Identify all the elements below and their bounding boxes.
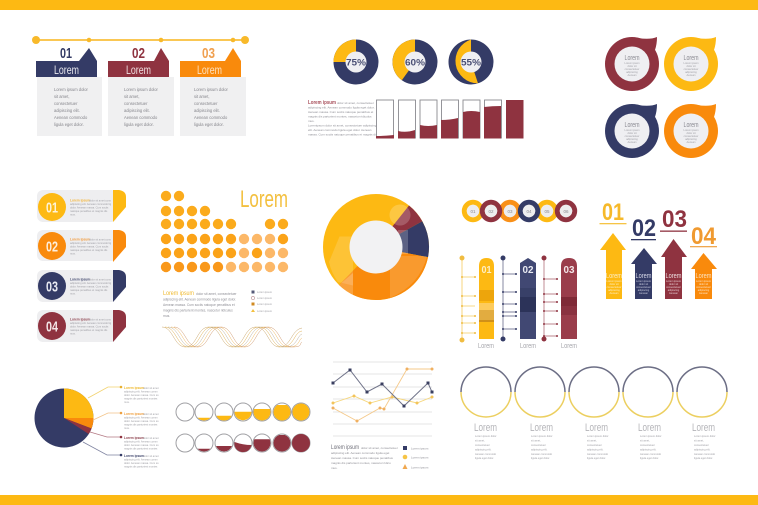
panel: arrow 03: Lorem [666,273,682,280]
circle item 2: Lorem ipsum dolor [531,434,553,438]
circle item 3: ligula eget dolor. [587,456,606,460]
row 01: 01 [46,200,58,216]
panel: arrow 04: 04 [691,223,717,250]
row 02: Lorem ipsum [70,238,90,242]
chart: yellow fill circles [176,403,310,421]
card 02: consectetuer [124,101,148,106]
row 03: 03 [46,278,58,296]
callout maroon: Lorem ipsum [124,436,144,440]
ring yellow: consectetuer [684,67,699,71]
callout maroon: magnis dis parturient montes [124,446,158,450]
legend: dot matrix: Lorem ipsum [257,309,272,313]
panel: arrow 01 [600,199,626,299]
panel: numbered rows [37,190,126,342]
legend: line graph: Lorem ipsum [411,446,429,450]
text block: line graph description: Aenean massa. Cum sociis natoque penatibus [331,456,393,460]
panel: ring chain: 05 [544,209,550,214]
callout maroon: adipiscing elit. Aenean comm [124,440,158,444]
row 04: 04 [46,318,58,336]
callout maroon [90,432,159,450]
panel: arrow 03: 03 [662,206,687,233]
row 03: natoque penatibus et magnis dis [70,288,108,292]
panel: arrow 02: Aenean [639,291,649,295]
panel: arrow 04 [690,223,717,299]
text block: bar description: Lorem ipsum [308,100,336,106]
series orange [332,368,434,422]
legend: dot matrix: Lorem ipsum [257,296,272,300]
circle item 3: Aenean commodo [587,452,609,456]
circle item 1: ligula eget dolor. [475,456,494,460]
text block: bar description [308,100,378,136]
panel: ring chain: 01 [470,209,476,214]
panel: arrow 04: Aenean [699,291,709,295]
card 01: adipiscing elit. [54,108,80,113]
row 01 [37,190,126,222]
ring maroon [605,37,659,91]
ring orange: dolor sit [686,131,696,135]
circle item 3: consectetuer [587,443,602,447]
text block: dot matrix description: dolor sit amet, consectetuer [196,292,237,296]
ring maroon: adipiscing [626,70,638,74]
panel: column 02 with ticks: 02 [522,265,534,276]
panel: arrow 04: Lorem ipsum [696,279,711,283]
circle item 2: ligula eget dolor. [531,456,550,460]
card 03: consectetuer [194,101,218,106]
ring navy: consectetuer [625,134,640,138]
ring maroon: consectetuer [625,67,640,71]
panel: ring chain: 06 [563,209,569,214]
row 03: dolor. Aenean massa. Cum sociis [70,284,109,288]
callout yellow: dolor. Aenean massa. Cum so [124,393,159,397]
text block: bar description: Aenean massa. Cum sociis natoque penatibus et [308,110,373,114]
row 02: natoque penatibus et magnis dis [70,248,108,252]
panel: arrow 02: consectetuer [636,285,651,289]
panel: arrow 04: adipiscing [698,288,710,292]
row 02 [37,230,126,262]
panel: ring chain: 04 [526,209,532,214]
panel: arrow 01: 01 [602,199,624,226]
callout yellow [88,386,159,404]
callout maroon: dolor. Aenean massa. Cum so [124,443,159,447]
row 04: mus. [70,332,76,336]
card 02: Aenean commodo [124,115,158,120]
row 01: natoque penatibus et magnis dis [70,209,108,213]
callout yellow: mus. [124,401,130,404]
panel: arrow 01: Lorem ipsum [606,279,622,283]
panel: arrow 03 [660,206,687,299]
text block: bar description: mus. [308,119,315,123]
card 01: Aenean commodo [54,115,88,120]
circle item 4: Lorem [638,422,661,434]
ring orange [664,104,718,158]
legend: dot matrix [251,290,272,313]
panel: arrow 01: Lorem [606,273,622,280]
text block: line graph description [331,444,398,470]
row 04: Lorem ipsum [70,318,90,322]
card 01: ligula eget dolor. [54,122,84,127]
panel: arrow 03: Lorem ipsum [666,279,681,283]
panel: arrow 03: Aenean [669,291,679,295]
panel: arrow 02: dolor sit [639,282,648,286]
card 03: Lorem [197,63,222,77]
ring orange: consectetuer [684,134,699,138]
donut 55%: 55% [461,58,481,68]
text block: bar description: elit. Aenean commodo ligula eget dolor. Aenean [308,128,372,132]
card 01: consectetuer [54,101,78,106]
ring navy: dolor sit [627,131,637,135]
text block: dot matrix description [163,290,237,318]
circle item 5: sit amet, [694,438,704,442]
legend: dot matrix: Lorem ipsum [257,290,272,294]
circle item 5: Lorem [692,422,715,434]
callout orange: dolor. Aenean massa. Cum so [124,419,159,423]
callout navy: Lorem ipsum [124,454,144,458]
row 02: adipiscing elit. Aenean commodo lig [70,241,112,245]
row 02: 02 [46,238,58,256]
panel: outline circles with captions [461,367,727,460]
ring maroon: Aenean [628,73,637,77]
circle item 2 [515,367,565,460]
row 04: dolor sit amet cons [89,318,111,322]
circle item 3: Lorem [585,422,608,434]
ring navy [605,104,659,158]
panel: arrow 02: 02 [632,215,656,242]
circle item 4: consectetuer [640,443,655,447]
ring yellow: dolor sit [686,64,696,68]
top yellow band [0,0,758,10]
ring navy: Lorem ipsum [624,128,640,132]
ring yellow: Lorem [684,55,699,62]
panel: column 03 with ticks: 03 [564,265,575,276]
circle item 5 [677,367,727,460]
highlights [329,204,427,299]
card 03: ligula eget dolor. [194,122,224,127]
text block: bar description: massa. Cum sociis natoque penatibus et magnis dis [308,132,378,136]
callout navy: dolor. Aenean massa. Cum so [124,461,159,465]
circle item 1: adipiscing elit. [475,448,492,452]
callout orange: adipiscing elit. Aenean comm [124,416,158,420]
card 03: Lorem ipsum dolor [194,87,229,92]
circle item 5: consectetuer [694,443,709,447]
card 02: Lorem ipsum dolor [124,87,159,92]
panel: arrow 02: Lorem ipsum [636,279,651,283]
donut 75%: 75% [346,58,366,68]
legend: line graph: Lorem ipsum [411,456,429,460]
circle item 3: sit amet, [587,438,597,442]
circle item 3: Lorem ipsum dolor [587,434,609,438]
row 02: dolor sit amet cons [89,238,111,242]
circle item 2: Aenean commodo [531,452,553,456]
legend: line graph: Lorem ipsum [411,466,429,470]
panel: column 03 with ticks [542,256,577,350]
callout orange: magnis dis parturient montes [124,422,158,426]
row 01: adipiscing elit. Aenean commodo lig [70,202,112,206]
row 01: mus. [70,214,76,216]
text block: line graph description: dolor sit amet, consectetuer [361,446,398,450]
row 03: adipiscing elit. Aenean commodo lig [70,281,112,285]
ring navy: Lorem [624,122,640,129]
row 02: dolor. Aenean massa. Cum sociis [70,244,109,248]
callout navy: dolor sit amet [143,454,159,458]
row 03 [37,270,126,302]
text block: dot matrix description: Lorem ipsum [163,290,194,297]
card 01: sit amet, [54,94,69,99]
panel: speech rings [605,37,718,158]
row 01: dolor. Aenean massa. Cum sociis [70,206,109,210]
circle item 3: adipiscing elit. [587,448,604,452]
chart: pie [34,388,94,448]
callout navy: magnis dis parturient montes [124,464,158,468]
card 03: sit amet, [194,94,209,99]
ring navy: adipiscing [626,137,638,141]
circle item 2: sit amet, [531,438,541,442]
card 02: ligula eget dolor. [124,122,154,127]
card 02: 02 [132,46,145,62]
circle item 5: adipiscing elit. [694,448,711,452]
card 01 [36,46,102,136]
row 01: dolor sit amet cons [89,198,111,202]
bottom yellow band [0,495,758,505]
callout yellow: magnis dis parturient montes [124,396,158,400]
circle item 5: Lorem ipsum dolor [694,434,716,438]
legend: dot matrix: Lorem ipsum [257,302,272,306]
card 01: 01 [60,46,72,62]
row 04: natoque penatibus et magnis dis [70,328,108,332]
ring orange: Lorem ipsum [684,128,698,132]
donut 55% [448,40,494,84]
row 04: adipiscing elit. Aenean commodo lig [70,321,112,325]
card 02: sit amet, [124,94,139,99]
ring yellow: adipiscing [685,70,697,74]
text block: dot matrix description: adipiscing elit. Aenean commodo ligula eget dolor. [163,298,236,302]
panel: arrow 02: adipiscing [638,288,650,292]
circle item 5: ligula eget dolor. [694,456,713,460]
text block: dot matrix description: magnis dis parturient montes, nascetur ridiculus [163,308,233,312]
ring maroon: Lorem ipsum [624,61,640,65]
circle item 1 [461,367,511,460]
callout orange: dolor sit amet [143,412,159,416]
panel: arrow 04: dolor sit [699,282,708,286]
panel: ring chain: 02 [488,209,494,214]
heading: Lorem: Lorem [240,186,288,213]
text block: line graph description: magnis dis parturient montes, nascetur ridicu [331,461,391,465]
card 02: adipiscing elit. [124,108,150,113]
text block: line graph description: adipiscing elit. Aenean commodo ligula eget [331,451,390,455]
donut 75% [334,40,378,84]
chart: large donut [323,194,429,300]
circle item 4: sit amet, [640,438,650,442]
circle item 1: Lorem [474,422,497,434]
ring maroon: Lorem [624,55,640,62]
card 02 [108,46,174,136]
circle item 1: Aenean commodo [475,452,497,456]
row 03: dolor sit amet cons [89,278,111,282]
panel: column 01 with ticks [460,256,494,350]
text block: dot matrix description: Aenean massa. Cum sociis natoque penatibus et [163,303,235,307]
circle item 1: consectetuer [475,443,490,447]
circle item 2: consectetuer [531,443,546,447]
row 04: dolor. Aenean massa. Cum sociis [70,324,109,328]
card 02: Lorem [126,63,151,77]
card 01: Lorem ipsum dolor [54,87,89,92]
panel: arrow 01: adipiscing [608,288,620,292]
panel: ring chain [464,202,575,220]
panel: arrow 03: dolor sit [669,282,678,286]
circle item 3 [569,367,619,460]
panel: column 02 with ticks [500,256,536,350]
row 03: Lorem ipsum [70,278,90,282]
ring orange: adipiscing [685,137,697,141]
row 02: mus. [70,252,76,256]
callout maroon: dolor sit amet [143,436,159,440]
ring navy: Aenean [628,140,637,144]
panel: arrow 02: Lorem [636,273,652,280]
panel: column 01 with ticks: 01 [482,265,492,276]
callout orange [93,412,159,430]
row 03: mus. [70,292,76,296]
circle item 4: Lorem ipsum dolor [640,434,662,438]
ring yellow [664,37,718,91]
panel: arrow 04: consectetuer [696,285,711,289]
pie callouts [83,386,159,468]
circle item 1: Lorem ipsum dolor [475,434,497,438]
panel: arrow 03: consectetuer [666,285,681,289]
text block: line graph description: mus. [331,466,338,470]
donut 60%: 60% [405,58,425,68]
chart: dot matrix [161,191,288,272]
series yellow [332,394,434,404]
callout yellow: adipiscing elit. Aenean comm [124,390,158,394]
chart: wave lines [162,327,302,347]
panel: column 01 with ticks: Lorem [478,343,494,350]
timeline [32,36,249,44]
panel: column 03 with ticks: Lorem [561,343,577,350]
callout orange: mus. [124,427,130,430]
circle item 4: ligula eget dolor. [640,456,659,460]
ring yellow: Aenean [687,73,696,77]
card 03: 03 [202,46,215,62]
panel: arrow 01: dolor sit [609,282,619,286]
panel: arrow 04: Lorem [696,273,712,280]
circle item 2: Lorem [530,422,553,434]
row 01: Lorem ipsum [70,198,90,202]
circle item 4: adipiscing elit. [640,448,657,452]
callout orange: Lorem ipsum [124,412,144,416]
card 03 [180,46,246,136]
callout yellow: Lorem ipsum [124,386,144,390]
text block: bar description: dolor sit amet, consectetuer [337,101,374,105]
text block: dot matrix description: mus. [163,314,170,318]
ring maroon: dolor sit [627,64,637,68]
panel: arrow 02 [631,215,657,299]
panel: percentage donuts [334,40,494,84]
panel: column 02 with ticks: Lorem [520,343,536,350]
card 01: Lorem [54,63,79,77]
panel: ring chain: 03 [507,209,513,214]
circle item 2: adipiscing elit. [531,448,548,452]
callout navy [83,442,159,468]
circle item 4 [623,367,673,460]
card 03: adipiscing elit. [194,108,220,113]
legend: line graph [402,446,429,470]
panel: arrow 03: adipiscing [668,288,680,292]
ring orange: Aenean [687,140,696,144]
callout navy: adipiscing elit. Aenean comm [124,458,158,462]
text block: bar description: adipiscing elit. Aenean commodo ligula eget dolor. [308,106,375,110]
chart: maroon fill circles [176,434,310,452]
circle item 4: Aenean commodo [640,452,662,456]
panel: arrow 01: Aenean [610,291,619,295]
ring orange: Lorem [684,122,699,129]
chart: fill level bars [376,100,524,138]
panel: numbered timeline cards [32,36,249,136]
donut 60% [392,40,438,84]
circle item 5: Aenean commodo [694,452,716,456]
text block: line graph description: Lorem ipsum [331,444,359,451]
panel: arrow 01: consectetuer [607,285,622,289]
series navy [332,368,434,408]
row 04 [37,310,126,342]
text block: bar description: magnis dis parturient montes, nascetur ridiculus [308,114,372,118]
ring yellow: Lorem ipsum [684,61,698,65]
text block: bar description: Loremipsum dolor sit amet, consectetuer adipiscing [308,124,377,128]
circle item 1: sit amet, [475,438,485,442]
card 03: Aenean commodo [194,115,228,120]
callout yellow: dolor sit amet [143,386,159,390]
chart: line graph [332,362,434,436]
